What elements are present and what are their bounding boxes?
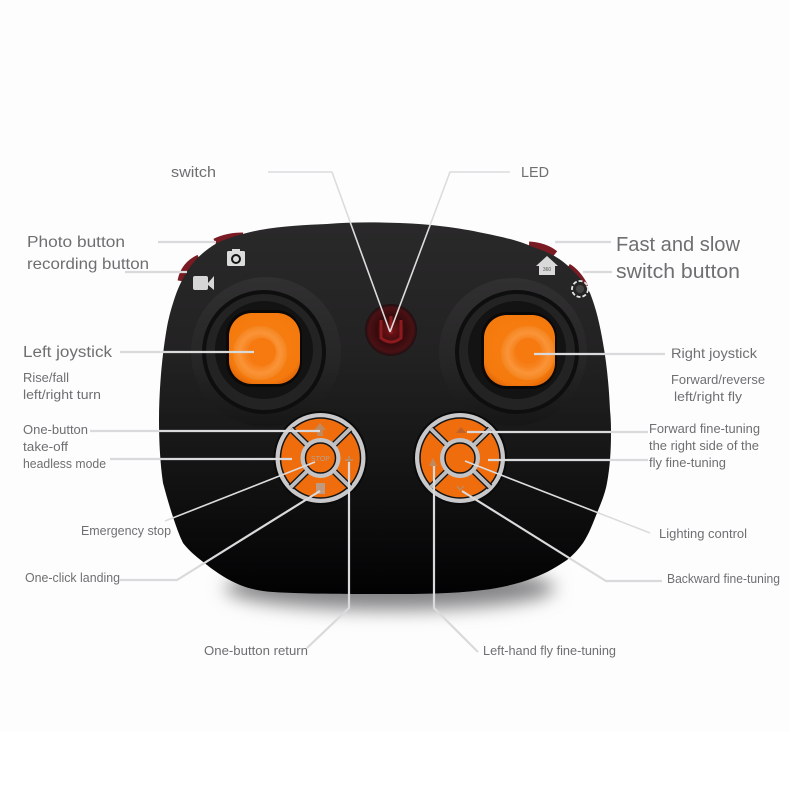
leader line: switch [268, 172, 390, 332]
label: fast and slow switch button: Fast and slow [616, 234, 741, 256]
icon: camera [227, 249, 245, 266]
leader line: right joystick [534, 353, 665, 355]
label: one-button return: One-button return [204, 643, 308, 658]
label: switch: switch [171, 164, 216, 181]
leader line: fast and slow upper [555, 241, 611, 243]
power switch LED [365, 304, 417, 356]
leader line: one-button return [307, 462, 349, 648]
label: left joystick: Left joystick [23, 344, 112, 361]
label: one-button take-off headless mode: take-off [23, 439, 68, 454]
icon: speed dial [572, 281, 588, 297]
right joystick [439, 278, 587, 426]
leader line: forward fine-tuning [467, 431, 648, 433]
label: forward and side fine-tuning: Forward fine-tuning [649, 421, 760, 436]
left button pad: STOP [311, 456, 330, 463]
label: one-click landing: One-click landing [25, 570, 120, 585]
leader line: emergency stop [165, 462, 315, 521]
label: forward and side fine-tuning [649, 421, 760, 470]
icon: home: 360 [543, 267, 551, 273]
label: right joystick functions: Forward/reverse [671, 373, 765, 387]
leader line: backward fine-tuning [462, 491, 662, 581]
controller drop shadow [225, 566, 555, 610]
leader line: left joystick [120, 351, 254, 353]
leader line: recording button [125, 271, 187, 273]
label: one-button take-off headless mode [23, 422, 106, 471]
left button pad [274, 411, 368, 505]
label: left joystick functions: left/right turn [23, 388, 101, 402]
leader line: lighting control [465, 461, 650, 533]
label: photo and recording [27, 234, 149, 273]
label: left-hand fly fine-tuning: Left-hand fly fine-tuning [483, 643, 616, 658]
label: fast and slow switch button [616, 234, 741, 283]
label: forward and side fine-tuning: fly fine-tuning [649, 455, 726, 470]
label: left joystick functions: Rise/fall [23, 371, 69, 385]
label: right joystick functions [671, 373, 765, 404]
label: one-button take-off headless mode: One-button [23, 422, 88, 437]
right button pad [413, 411, 507, 505]
leader line: photo button [158, 241, 216, 243]
label: fast and slow switch button: switch button [616, 261, 740, 283]
leader line: one-button take-off [90, 430, 320, 432]
leader line: right side fine-tuning [488, 459, 648, 461]
left joystick [191, 277, 341, 427]
controller body [159, 222, 611, 594]
label: LED: LED [521, 164, 549, 181]
label: one-button take-off headless mode: headless mode [23, 456, 106, 471]
leader line: one-click landing [120, 491, 320, 580]
leader line: headless mode [110, 458, 292, 460]
label: emergency stop: Emergency stop [81, 523, 171, 538]
leader line: left-hand fine-tuning [434, 466, 478, 652]
label: photo and recording: Photo button [27, 234, 125, 251]
label: forward and side fine-tuning: the right side of the [649, 438, 759, 453]
label: photo and recording: recording button [27, 256, 149, 273]
icon: home [536, 256, 558, 275]
leader line: fast and slow lower [583, 271, 612, 273]
label: left joystick functions [23, 371, 101, 402]
label: backward fine-tuning: Backward fine-tuning [667, 572, 780, 586]
label: right joystick functions: left/right fly [674, 390, 743, 404]
leader line: LED [390, 172, 510, 332]
icon: video camera [193, 276, 214, 290]
label: right joystick: Right joystick [671, 345, 758, 361]
shoulder wheels [181, 236, 585, 287]
label: lighting control: Lighting control [659, 526, 747, 541]
